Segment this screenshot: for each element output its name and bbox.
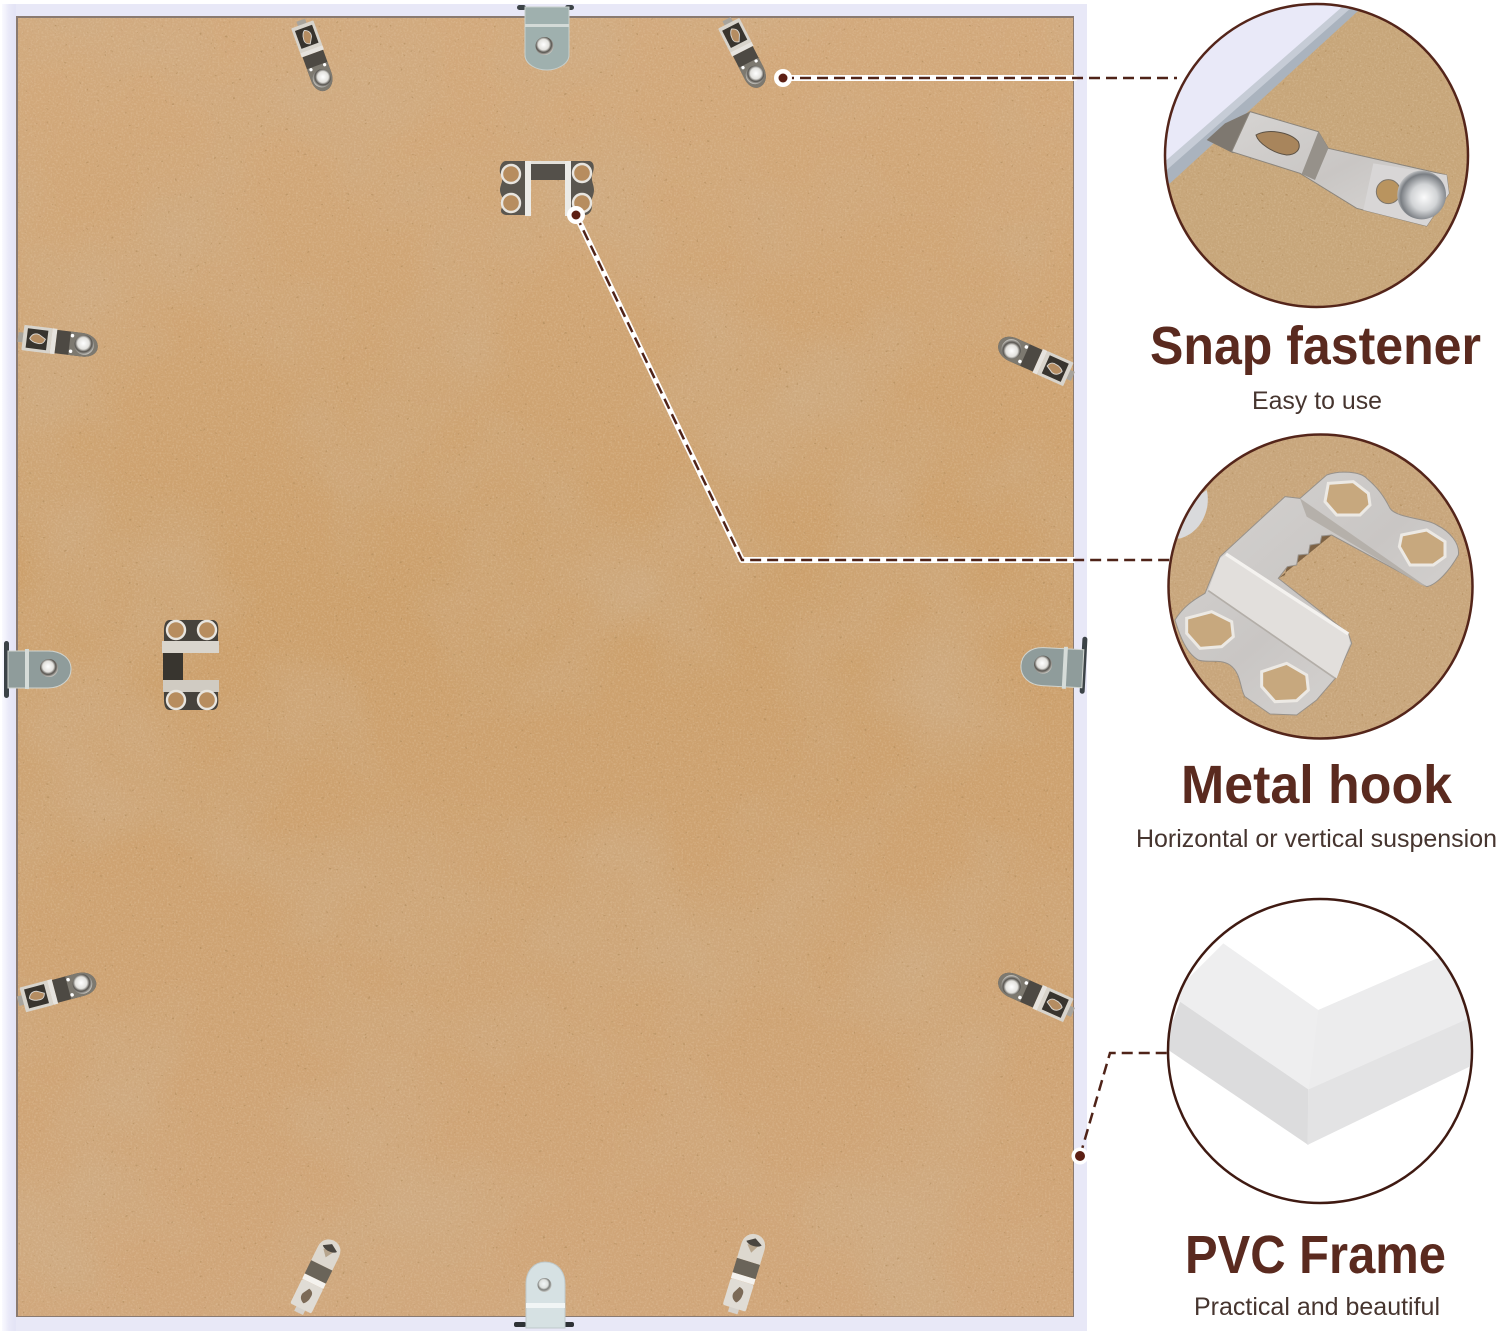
turn button: top — [517, 5, 574, 70]
panel: PVC frame detail — [1160, 890, 1480, 1321]
sawtooth hook: top centre — [500, 161, 594, 216]
detail circle: metal hook — [1160, 430, 1480, 742]
snap fastener: left lower — [15, 968, 99, 1014]
callout line: snap fastener — [774, 69, 1177, 87]
PVC frame border — [2, 4, 1087, 1331]
snap fastener: left upper — [16, 324, 99, 359]
turn button: bottom — [514, 1262, 574, 1328]
snap fastener: bottom right — [721, 1231, 768, 1316]
heading: Snap fastener: Snap fastener — [1150, 316, 1481, 376]
caption: Practical and beautiful: Practical and beautiful — [1194, 1293, 1440, 1321]
turn button: right — [1020, 634, 1088, 694]
panel: metal hook detail — [1136, 430, 1497, 853]
callout dot — [1072, 1148, 1088, 1164]
detail circle: PVC frame — [1169, 944, 1471, 1145]
heading: Metal hook: Metal hook — [1181, 755, 1453, 815]
sawtooth hook: left — [162, 620, 219, 710]
caption: Easy to use: Easy to use — [1252, 387, 1382, 415]
callout line: PVC frame — [1072, 1053, 1168, 1164]
snap fastener: top right — [716, 14, 771, 92]
snap fastener: right lower — [994, 968, 1078, 1024]
callout dot — [567, 206, 585, 224]
callout line: metal hook — [567, 206, 1175, 560]
turn button: left — [4, 641, 71, 698]
heading: PVC Frame: PVC Frame — [1185, 1225, 1446, 1285]
backing board — [16, 16, 1074, 1317]
caption: Horizontal or vertical suspension: Horizontal or vertical suspension — [1136, 825, 1497, 853]
snap fastener: top left — [290, 16, 337, 94]
snap fastener: bottom left — [288, 1235, 344, 1318]
panel: snap fastener detail — [1150, 0, 1481, 415]
detail circle: snap fastener — [1166, 5, 1467, 306]
callout dot — [774, 69, 792, 87]
snap fastener: right upper — [994, 332, 1078, 388]
